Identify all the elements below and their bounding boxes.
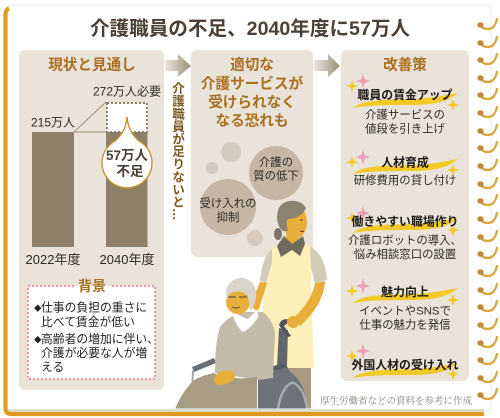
measure: wages: 介護サービスの	[365, 108, 445, 122]
box: background: 高齢者の増加に伴い、	[41, 332, 159, 346]
heading: risk: 受けられなく	[208, 93, 296, 111]
measure: workplace: 働きやすい職場作り	[351, 214, 459, 228]
measure: appeal: 魅力向上	[381, 285, 429, 299]
bar chart	[26, 84, 161, 267]
vertical text: if staff are short: 介護職員が足りないと…	[170, 82, 184, 221]
callout: 570,000 shortage: 57万人	[106, 148, 149, 163]
heading: risk: 適切な	[230, 56, 274, 74]
panel: risk	[191, 50, 313, 257]
box: background: 仕事の負担の重さに	[41, 300, 147, 314]
box: background	[28, 278, 159, 379]
box: background: える	[41, 360, 64, 374]
measure: training: 人材育成	[381, 156, 429, 170]
measure: appeal: イベントやSNSで	[359, 304, 451, 318]
cloud: lower care quality	[249, 146, 303, 200]
box: background: ◆	[34, 304, 42, 313]
measure: workplace: 悩み相談窓口の設置	[354, 247, 456, 261]
panel: current state and outlook	[19, 50, 164, 390]
measure: foreign workers: 外国人材の受け入れ	[351, 358, 459, 372]
measure: appeal: 仕事の魅力を発信	[359, 318, 451, 332]
cloud: lower care quality: 介護の	[259, 155, 293, 169]
box: background: ◆	[34, 336, 42, 344]
title: 介護職員の不足、2040年度に57万人	[90, 17, 410, 40]
bar chart: 215万人	[31, 116, 75, 130]
illustration: wheelchair	[192, 316, 307, 412]
cloud: restricted intake: 抑制	[217, 210, 239, 224]
bar chart: 272万人必要	[93, 84, 161, 98]
illustration: caregiver	[250, 201, 327, 412]
arrow: to middle panel	[165, 54, 191, 77]
measure: training	[346, 149, 459, 187]
measure: foreign workers	[346, 343, 459, 380]
bar chart: 2040年度	[100, 252, 154, 267]
heading: current state: 現状と見通し	[48, 56, 136, 74]
cloud: restricted intake: 受け入れの	[200, 197, 256, 210]
box: background: 背景	[78, 278, 106, 294]
measure: workplace	[346, 205, 462, 261]
measure: wages	[346, 73, 459, 136]
box: background: 比べて賃金が低い	[41, 315, 135, 329]
measure: training: 研修費用の貸し付け	[354, 173, 456, 187]
cloud: restricted intake	[200, 179, 256, 235]
measure: workplace: 介護ロボットの導入、	[348, 233, 462, 247]
cloud: lower care quality: 質の低下	[253, 168, 299, 182]
heading: measures: 改善策	[383, 56, 427, 74]
panel: improvement measures	[341, 50, 469, 381]
source note: 厚生労働省などの資料を参考に作成	[320, 395, 472, 407]
callout: 570,000 shortage: 不足	[116, 164, 144, 179]
measure: appeal	[346, 278, 459, 332]
box: background: 介護が必要な人が増	[41, 346, 147, 360]
arrow: to right panel	[314, 54, 340, 77]
measure: wages: 職員の賃金アップ	[357, 88, 453, 102]
decorative clouds	[206, 142, 263, 246]
spiral binding	[477, 18, 497, 399]
heading: risk	[201, 56, 303, 130]
bar chart: 2022年度	[26, 252, 80, 267]
heading: risk: なる恐れも	[216, 112, 288, 130]
illustration: elderly person	[174, 278, 275, 412]
callout: 570,000 shortage	[102, 117, 152, 188]
heading: risk: 介護サービスが	[201, 74, 303, 92]
measure: wages: 値段を引き上げ	[365, 122, 445, 136]
